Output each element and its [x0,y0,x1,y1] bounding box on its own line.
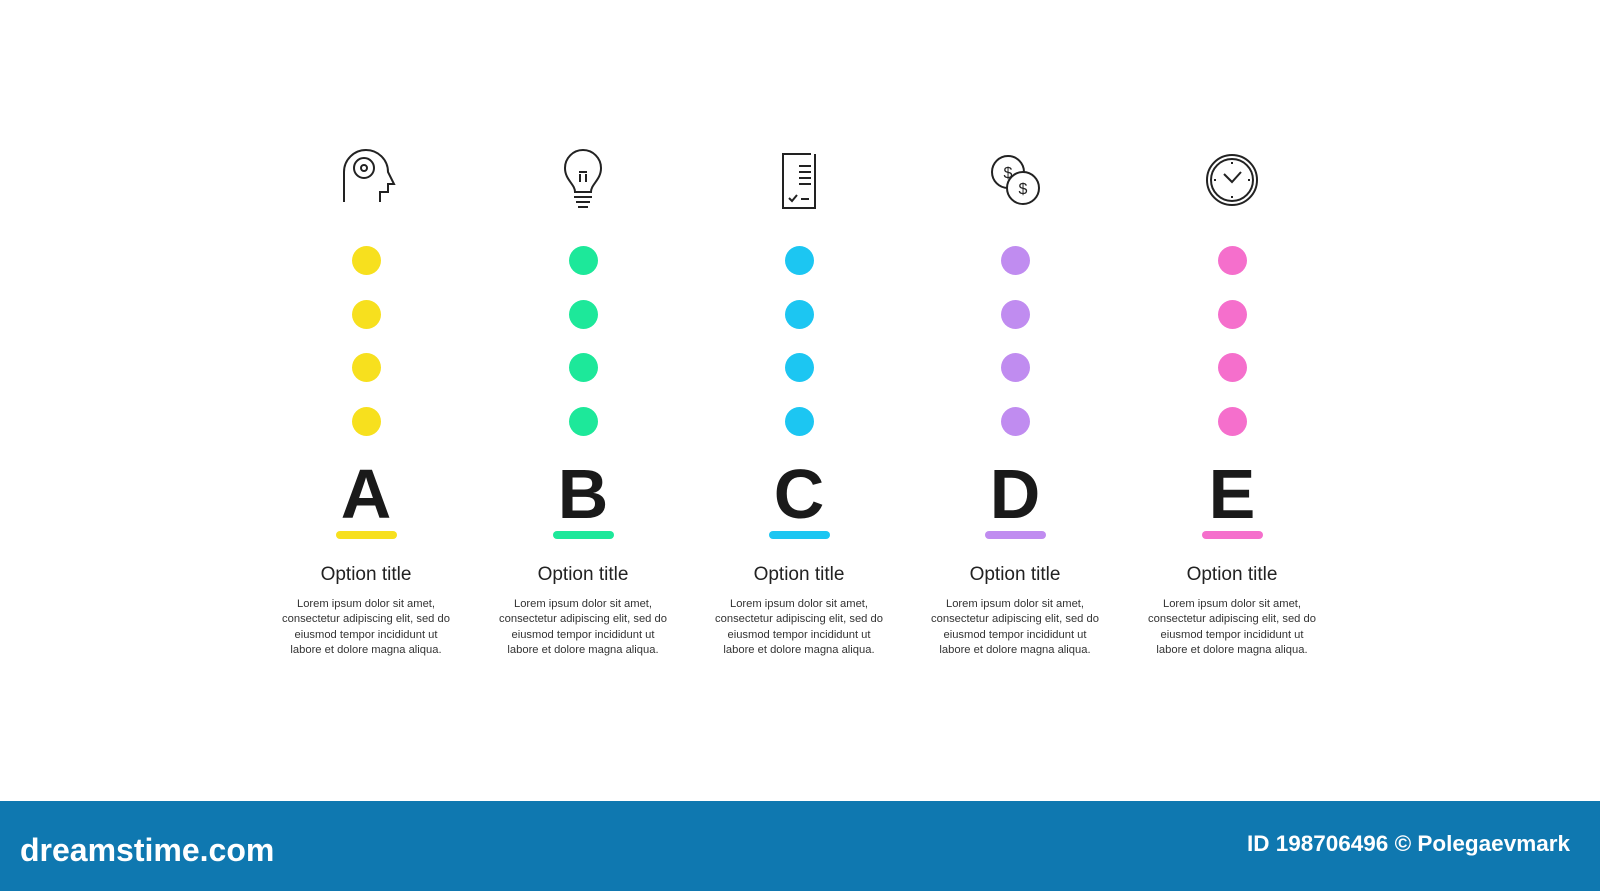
letter: B [558,455,608,533]
underline [769,531,830,539]
body text: consectetur adipiscing elit, sed do [715,613,883,625]
logo text: dreamstime.com [20,832,274,868]
body text: labore et dolore magna aliqua. [939,644,1091,656]
body text: eiusmod tempor incididunt ut [1160,629,1304,641]
column D [931,155,1099,656]
body text: eiusmod tempor incididunt ut [294,629,438,641]
id credit: ID 198706496 © Polegaevmark [1247,831,1570,856]
body text: eiusmod tempor incididunt ut [727,629,871,641]
icon: light bulb [564,149,602,208]
body text [282,598,450,656]
body text: labore et dolore magna aliqua. [290,644,442,656]
column A [282,149,450,656]
option title: Option title [321,564,411,585]
dots [1218,246,1247,436]
body text: Lorem ipsum dolor sit amet, [1163,598,1301,610]
body text: Lorem ipsum dolor sit amet, [514,598,652,610]
letter: A [341,455,391,533]
option title: Option title [1187,564,1277,585]
body text: Lorem ipsum dolor sit amet, [946,598,1084,610]
body text: Lorem ipsum dolor sit amet, [297,598,435,610]
body text [715,598,883,656]
underline [1202,531,1263,539]
column C [715,153,883,656]
letter: E [1209,455,1255,533]
body text: consectetur adipiscing elit, sed do [499,613,667,625]
icon: coins: $ [1019,181,1028,198]
option title: Option title [538,564,628,585]
body text: eiusmod tempor incididunt ut [943,629,1087,641]
option title: Option title [754,564,844,585]
icon: head with gear [343,149,396,202]
body text: consectetur adipiscing elit, sed do [931,613,1099,625]
body text: eiusmod tempor incididunt ut [511,629,655,641]
dots [785,246,814,436]
body text [931,598,1099,656]
underline [336,531,397,539]
underline [985,531,1046,539]
body text: consectetur adipiscing elit, sed do [1148,613,1316,625]
letter: C [774,455,824,533]
icon: clock [1206,154,1258,206]
underline [553,531,614,539]
body text [1148,598,1316,656]
icon: document [782,153,816,209]
icon: coins: $ [1004,165,1013,182]
dots [352,246,381,436]
body text [499,598,667,656]
column B [499,149,667,656]
icon: coins [991,155,1040,205]
body text: labore et dolore magna aliqua. [1156,644,1308,656]
dots [569,246,598,436]
body text: labore et dolore magna aliqua. [507,644,659,656]
option title: Option title [970,564,1060,585]
footer bar [0,801,1600,891]
column E [1148,154,1316,656]
body text: consectetur adipiscing elit, sed do [282,613,450,625]
letter: D [990,455,1040,533]
body text: Lorem ipsum dolor sit amet, [730,598,868,610]
dots [1001,246,1030,436]
body text: labore et dolore magna aliqua. [723,644,875,656]
